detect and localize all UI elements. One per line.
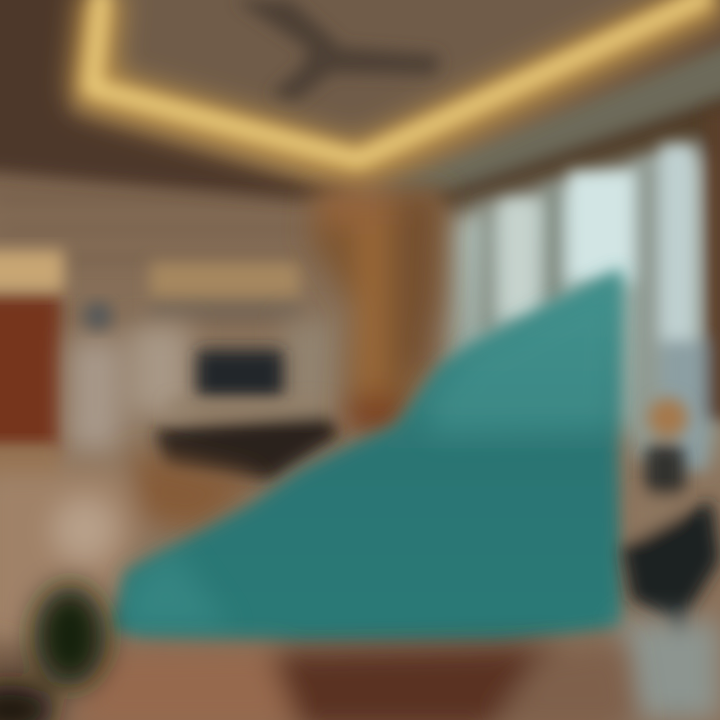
right floor glare [620,620,720,720]
window [450,145,715,460]
pale wall panels [70,320,335,450]
icon: wall clock [84,302,112,330]
floor and sofa foreground [0,640,640,720]
television [197,350,283,398]
curtain folds [482,110,720,470]
teal rising shape [112,268,622,642]
media console [155,400,340,480]
floor [0,450,260,650]
icon: ceiling fan [235,0,440,102]
cove light strip [92,0,720,165]
wall stripes [0,195,310,323]
wooden door with light [0,250,64,485]
person silhouette [622,398,720,700]
wall shelf [150,262,300,318]
potted plant [0,586,106,720]
ceiling [0,0,720,220]
brown drape [310,190,445,435]
